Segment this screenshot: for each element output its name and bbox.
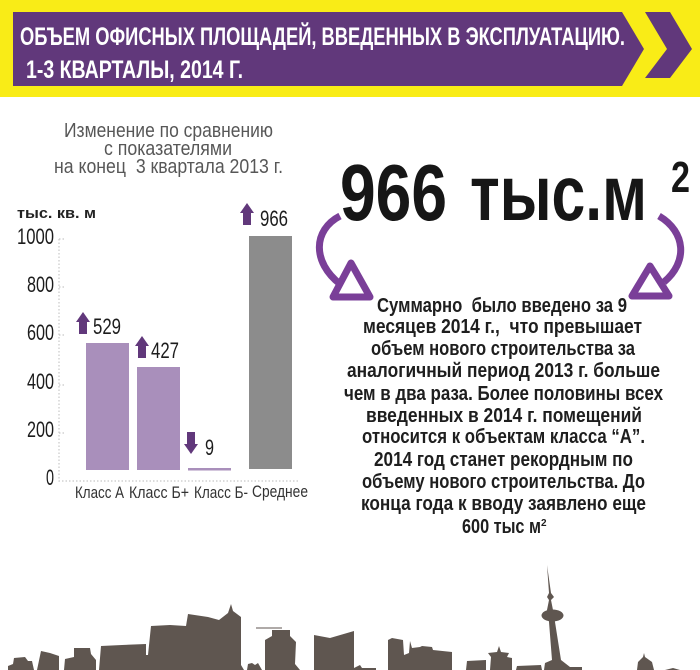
summary text: конца года к вводу заявлено еще [361,493,646,515]
summary text: месяцев 2014 г., что превышает [363,316,642,338]
chart heading: Изменение по сравнению [64,120,273,142]
y axis labels: 400 [27,369,54,394]
bar chart [17,203,308,502]
y axis labels: 200 [27,417,54,442]
category labels [75,483,308,502]
icon: right curved arrow [632,216,681,296]
summary text: объем нового строительства за [371,338,636,360]
chart heading: с показателями [104,138,232,160]
summary text: относится к объектам класса “А”. [362,426,645,448]
category labels: Класс Б- [194,484,248,502]
header band [0,0,700,97]
header chevron [645,12,692,78]
city skyline [8,565,680,670]
y axis labels: 1000 [17,224,54,249]
title: 1-3 КВАРТАЛЫ, 2014 Г. [26,56,243,84]
icon: left curved arrow [319,216,370,297]
title [20,21,625,84]
y axis labels: 0 [46,465,54,490]
big number: тыс.м [470,149,647,237]
category labels: Класс А [75,484,124,502]
value labels: 9 [205,435,214,460]
chart heading [54,120,283,178]
summary text: 2 [541,518,547,529]
summary text: 600 тыс м [462,516,541,538]
summary text [344,295,663,538]
value labels [93,206,288,460]
value arrows [76,203,254,454]
axes [59,239,299,481]
value labels: 427 [151,338,179,363]
big number [340,148,690,237]
summary text: аналогичный период 2013 г. больше [347,360,660,382]
chart heading: на конец 3 квартала 2013 г. [54,156,283,178]
summary text: 2014 год станет рекордным по [374,449,633,471]
big number: 2 [671,153,690,202]
value labels: 529 [93,314,121,339]
summary text: Суммарно было введено за 9 [377,295,627,317]
summary text: объему нового строительства. До [362,471,645,493]
big number: 966 [340,148,447,237]
header arrow panel [13,12,644,86]
y axis labels: 600 [27,320,54,345]
category labels: Среднее [252,483,308,501]
category labels: Класс Б+ [129,484,189,502]
bars [86,343,129,470]
y axis labels: 800 [27,272,54,297]
y axis labels [17,224,54,490]
value labels: 966 [260,206,288,231]
axis unit: тыс. кв. м [17,205,96,222]
summary text: введенных в 2014 г. помещений [366,405,642,427]
